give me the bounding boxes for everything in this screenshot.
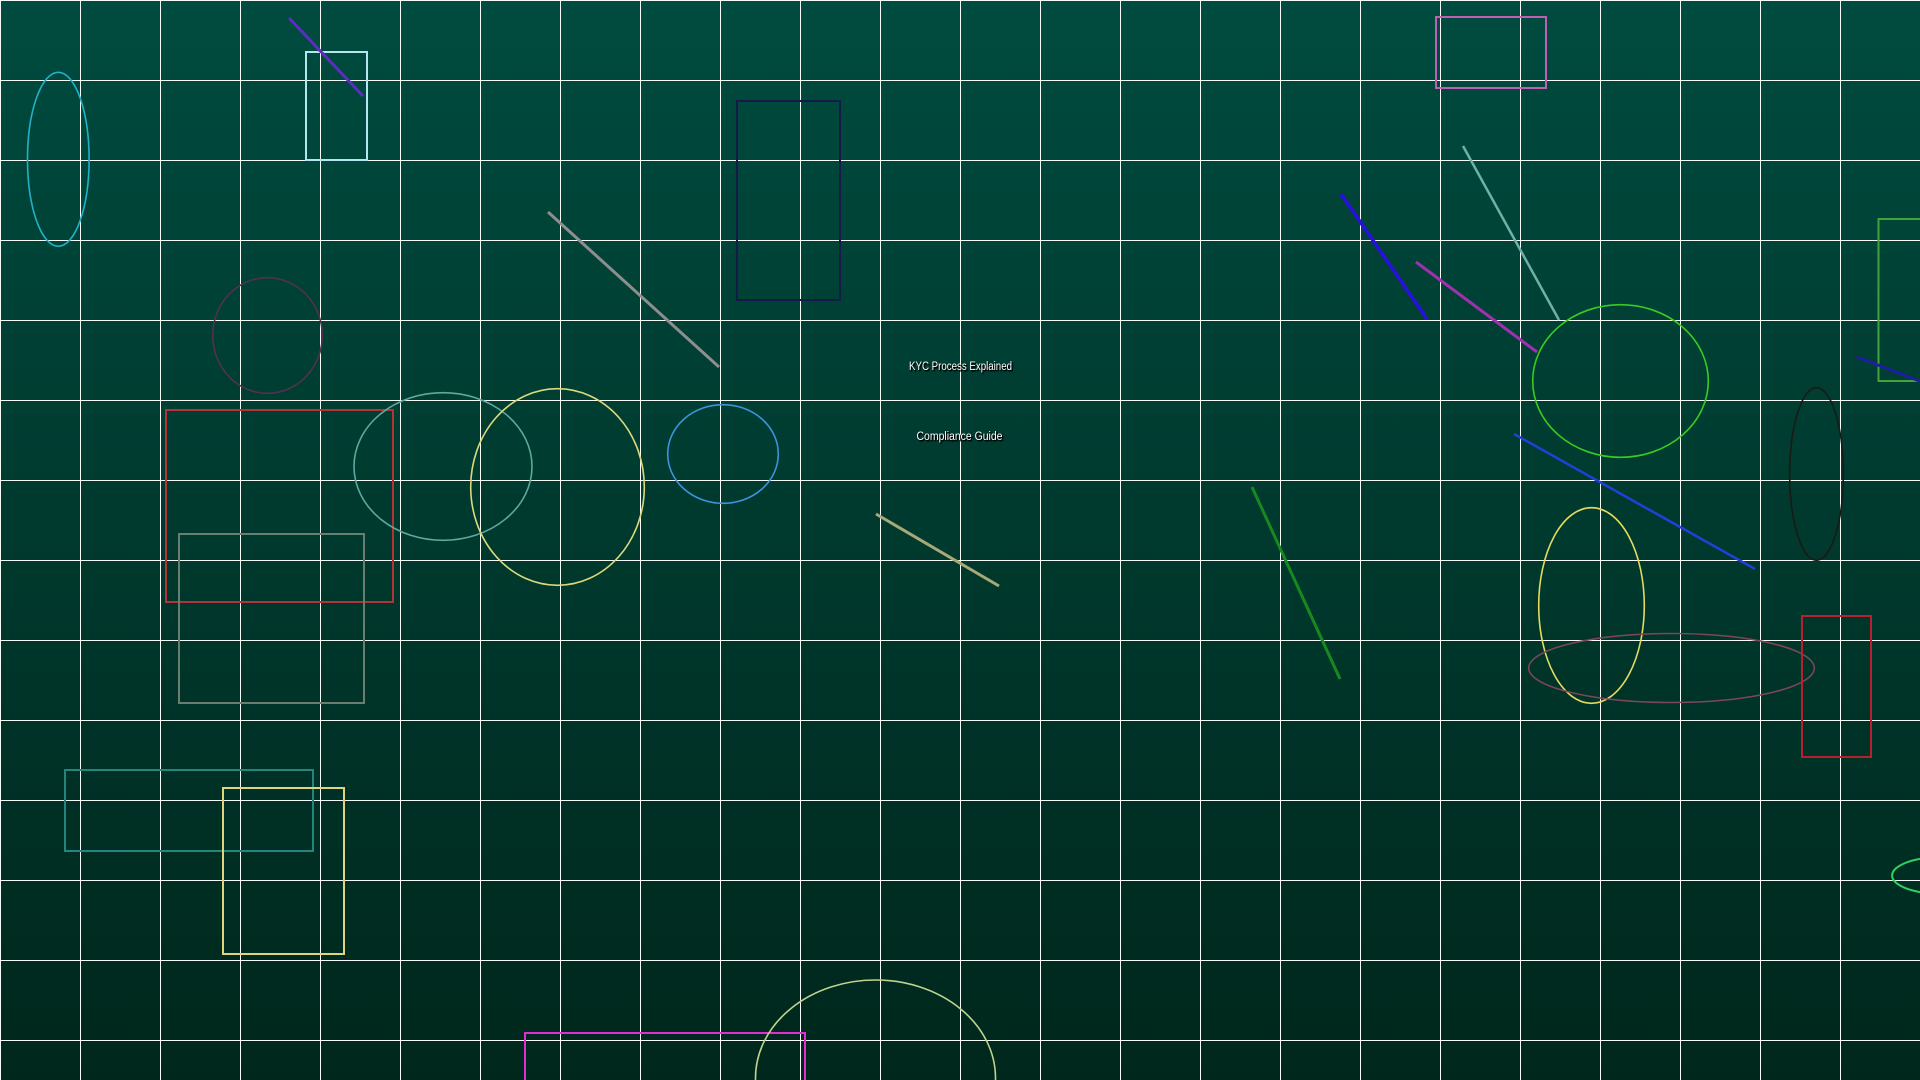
line: purple	[289, 18, 363, 96]
ellipse: maroon circle	[213, 278, 322, 393]
rectangle: pink	[1436, 17, 1546, 88]
line: violet	[1416, 262, 1537, 352]
title: KYC Process Explained	[909, 361, 1012, 373]
line: royal blue	[1514, 434, 1755, 569]
ellipse: cyan	[28, 72, 89, 246]
rectangle: yellow	[223, 788, 344, 954]
ellipse: yellow	[471, 389, 644, 585]
ellipse: yellow tall	[1539, 508, 1644, 703]
line: tan	[876, 514, 999, 586]
ellipse: blue	[668, 405, 778, 503]
line: green	[1252, 487, 1340, 679]
rectangle: crimson	[1802, 616, 1871, 757]
ellipse: pale green	[756, 980, 996, 1080]
rectangle: pale blue	[306, 52, 367, 160]
subtitle: Compliance Guide	[916, 431, 1002, 443]
rectangle: green	[1878, 219, 1920, 381]
ellipse: black	[1790, 388, 1843, 560]
line: dark blue	[1857, 357, 1920, 381]
rectangle: red	[166, 410, 393, 602]
rectangle: magenta	[525, 1033, 805, 1080]
rectangle: teal	[65, 770, 313, 851]
rectangle: navy	[737, 101, 840, 300]
line: grey	[548, 212, 719, 367]
line: bright blue	[1341, 194, 1427, 319]
ellipse: green small	[1892, 859, 1920, 892]
ellipse: lime	[1533, 305, 1708, 457]
ellipse: teal	[354, 393, 532, 540]
rectangle: grey green	[179, 534, 364, 703]
line: pale teal	[1463, 146, 1559, 320]
ellipse: rose wide	[1529, 634, 1814, 702]
